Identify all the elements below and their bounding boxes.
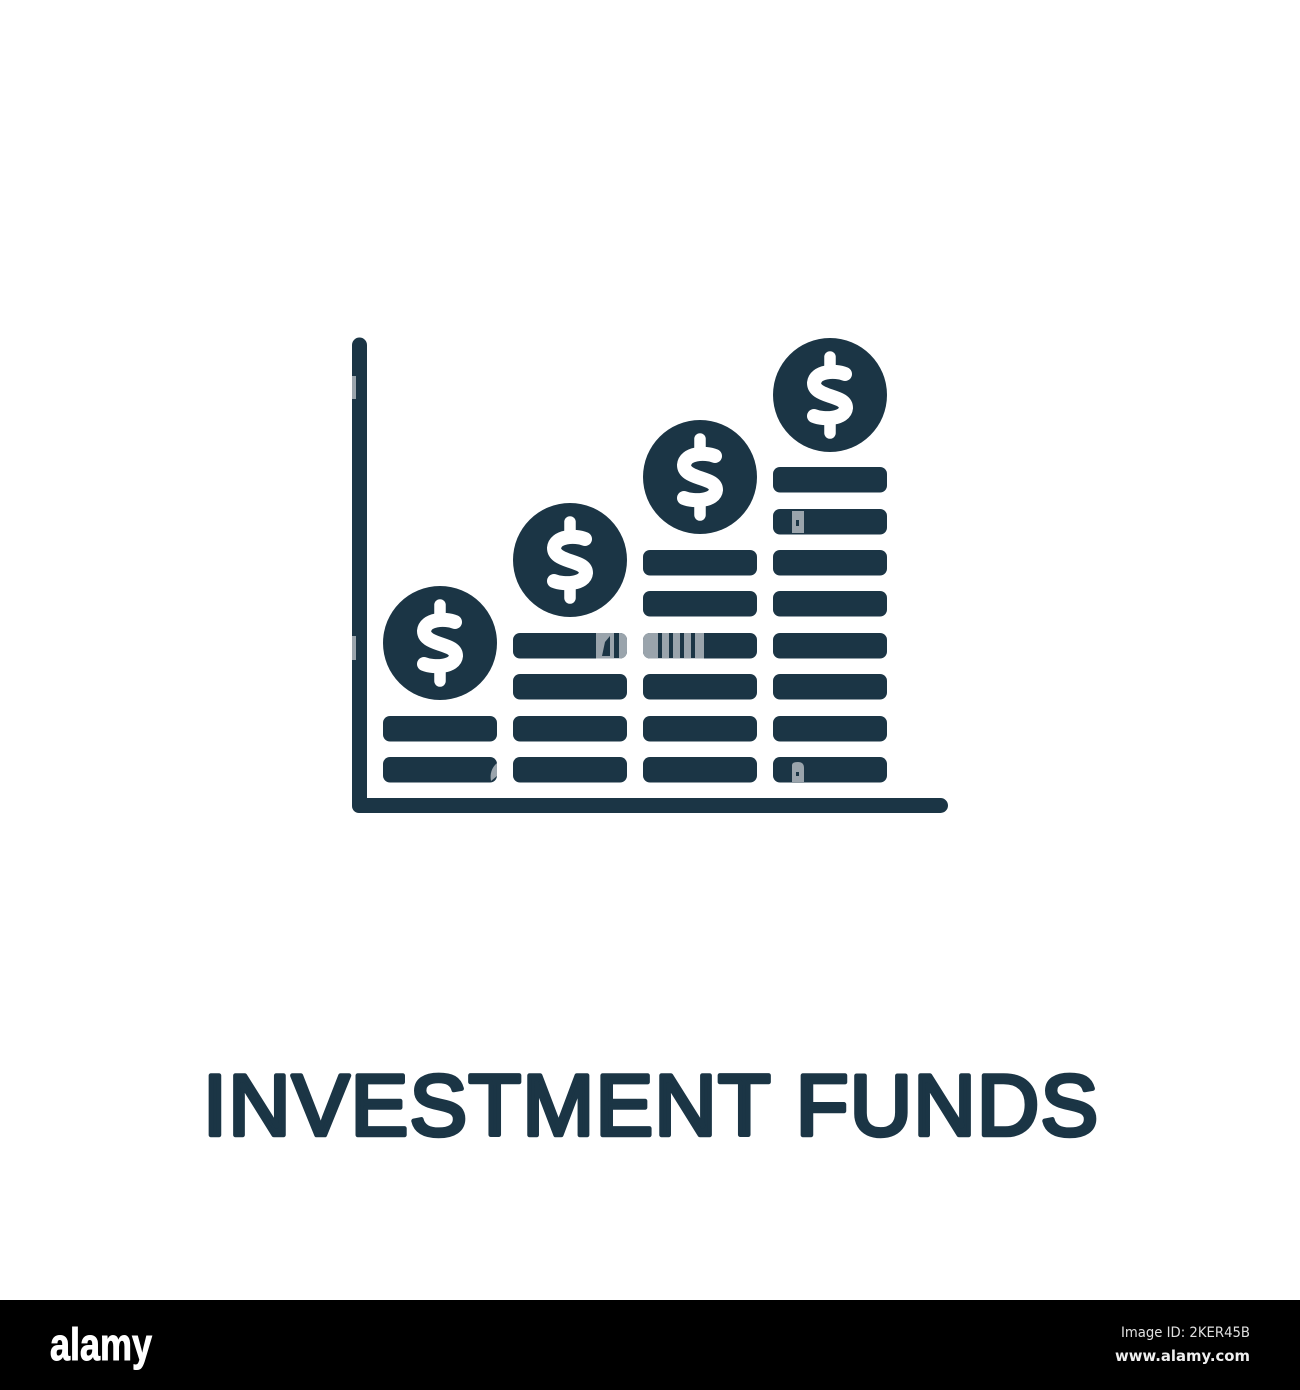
icon: dollar coin 3 [643,420,757,534]
coin stack 1 [383,716,497,782]
icon: dollar coin 2 [513,503,627,617]
footer bar [0,1300,1300,1390]
icon: rising coin stacks chart [352,338,948,813]
coin stack 4 [773,467,887,782]
icon: dollar coin 4 [773,338,887,452]
footer logo: alamy [50,1319,152,1370]
image id: Image ID: 2KER45B [1121,1325,1250,1341]
coin stack 2 [513,633,627,782]
icon: dollar coin 1 [383,586,497,700]
watermark ghost marks over the chart [352,376,804,782]
website: www.alamy.com [1115,1347,1250,1365]
chart axes [352,338,948,813]
coin stack 3 [643,550,757,782]
title: INVESTMENT FUNDS [203,1058,1098,1154]
